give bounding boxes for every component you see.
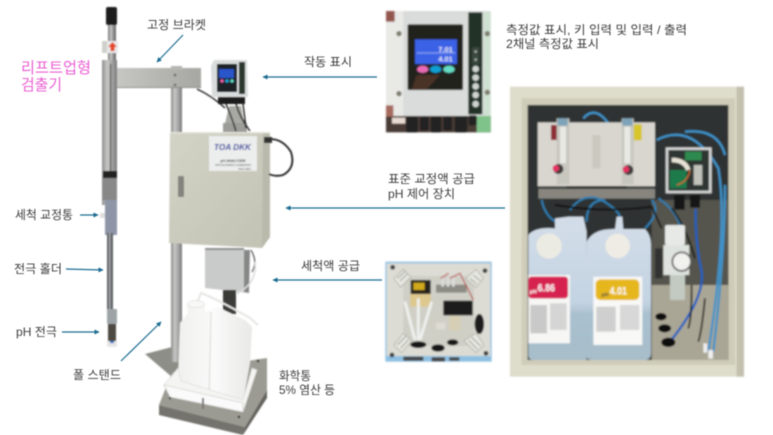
label: chemical container: 5% 염산 등 bbox=[279, 383, 335, 397]
nameplate: TOA DKK bbox=[214, 142, 252, 152]
label: operation display: 작동 표시 bbox=[304, 55, 352, 69]
arrow: pole stand bbox=[121, 322, 161, 361]
junction box bbox=[666, 147, 712, 193]
side key strip bbox=[468, 12, 482, 114]
nameplate: pH ANALYZER bbox=[221, 159, 246, 163]
pH 4.01 yellow label bbox=[596, 279, 639, 300]
cabinet door handle bbox=[178, 176, 184, 197]
front blue and black tubing bbox=[542, 197, 682, 232]
pole stand base plate bbox=[145, 347, 267, 435]
red up arrow mark bbox=[107, 41, 118, 53]
cabinet frame bbox=[510, 87, 744, 377]
cable and tube lower run bbox=[672, 208, 705, 342]
dark blue tube bbox=[670, 209, 702, 342]
controller cables bbox=[197, 89, 250, 131]
description: measured value display: 측정값 표시, 키 입력 및 입력 / 출력 bbox=[506, 23, 687, 37]
arrow: calibration supply bbox=[286, 207, 505, 209]
display bezel bbox=[408, 24, 463, 90]
blue LCD with readings: 7.01 bbox=[438, 45, 453, 54]
top knob bbox=[106, 7, 117, 25]
nameplate: HAAC-380G bbox=[238, 168, 251, 171]
electrode holder rod bbox=[107, 233, 113, 309]
air regulator bbox=[655, 225, 691, 300]
arrow: cleaning calibration cup bbox=[80, 214, 98, 216]
controller support post bbox=[223, 106, 247, 132]
left jug with pH 6.86 label bbox=[528, 217, 587, 360]
chemical container bbox=[178, 293, 258, 402]
label: pH electrode: pH 전극 bbox=[16, 325, 57, 339]
fixing bracket arm bbox=[117, 66, 201, 88]
nameplate: WITH AUTOMATIC CALIBRATION bbox=[215, 164, 251, 167]
tube end fittings bbox=[703, 343, 713, 359]
label: electrode holder: 전극 홀더 bbox=[14, 262, 62, 276]
steel mounting plate with flowmeters bbox=[538, 118, 655, 199]
back blue tubing bbox=[583, 113, 725, 352]
arrow: operation display bbox=[263, 76, 377, 78]
nameplate bbox=[209, 136, 257, 171]
analyzer assembly photo: lift-up detector on pole stand bbox=[100, 7, 292, 435]
power cable bbox=[269, 139, 292, 176]
pH 4.01 yellow label: 4.01 bbox=[610, 285, 627, 297]
label: standard calibration solution supply: pH 제어 장치 bbox=[388, 187, 455, 201]
label: lift-up detector: 리프트업형 bbox=[21, 59, 91, 77]
label: chemical container bbox=[279, 369, 335, 397]
pH 6.86 pink label: 6.86 bbox=[538, 283, 555, 295]
vertical pole bbox=[171, 88, 182, 362]
arrow: pH electrode bbox=[62, 331, 99, 333]
terminal block with red wires bbox=[436, 273, 473, 300]
label: chemical container: 화학통 bbox=[279, 369, 311, 383]
controller unit bbox=[211, 60, 248, 104]
arrow: fixing bracket bbox=[157, 35, 183, 62]
label: lift-up detector: 검출기 bbox=[21, 76, 62, 94]
pH electrode bbox=[107, 309, 117, 347]
blue LCD with readings bbox=[415, 39, 457, 64]
junction box glands bbox=[674, 195, 700, 210]
photo: calibration solution cabinet interior bbox=[510, 87, 744, 377]
photo: cleaning solution supply box interior bbox=[385, 262, 492, 362]
right jug with pH 4.01 label bbox=[586, 217, 651, 360]
photo: controller front panel bbox=[386, 11, 491, 132]
label: fixing bracket: 고정 브라켓 bbox=[147, 18, 206, 32]
label: pole stand: 폴 스탠드 bbox=[73, 368, 121, 382]
label: cleaning solution supply: 세척액 공급 bbox=[301, 259, 360, 273]
label: standard calibration solution supply bbox=[388, 172, 475, 201]
white tubes bbox=[405, 298, 432, 340]
cleaning solution supply box bbox=[205, 248, 255, 314]
main cabinet bbox=[169, 132, 292, 248]
label: cleaning calibration cup: 세척 교정통 bbox=[15, 208, 73, 222]
yellow and black transformer bbox=[410, 280, 431, 307]
grommets bbox=[410, 339, 458, 352]
brass and steel fittings bbox=[436, 314, 484, 334]
floor grommets bbox=[655, 313, 675, 347]
label: standard calibration solution supply: 표준 교정액 공급 bbox=[388, 172, 475, 186]
white tray bbox=[164, 368, 257, 412]
description: measured value display: 2채널 측정값 표시 bbox=[506, 37, 599, 51]
cable glands bbox=[406, 115, 477, 132]
description: measured value display bbox=[506, 23, 687, 51]
arrow: electrode holder bbox=[66, 269, 103, 270]
lift-up detector tube bbox=[100, 7, 118, 347]
pink, blue and green keys bbox=[417, 66, 455, 73]
cleaning calibration cup bbox=[105, 200, 117, 235]
corner screw posts bbox=[394, 269, 484, 353]
pH 6.86 pink label bbox=[528, 277, 568, 298]
pH 6.86 pink label: pH bbox=[530, 289, 537, 295]
black solenoid valve bbox=[443, 301, 473, 315]
arrow: cleaning solution supply bbox=[273, 279, 382, 281]
blue LCD with readings: 4.01 bbox=[438, 54, 453, 63]
label: lift-up detector bbox=[21, 59, 91, 94]
pH 4.01 yellow label: pH bbox=[601, 292, 609, 298]
